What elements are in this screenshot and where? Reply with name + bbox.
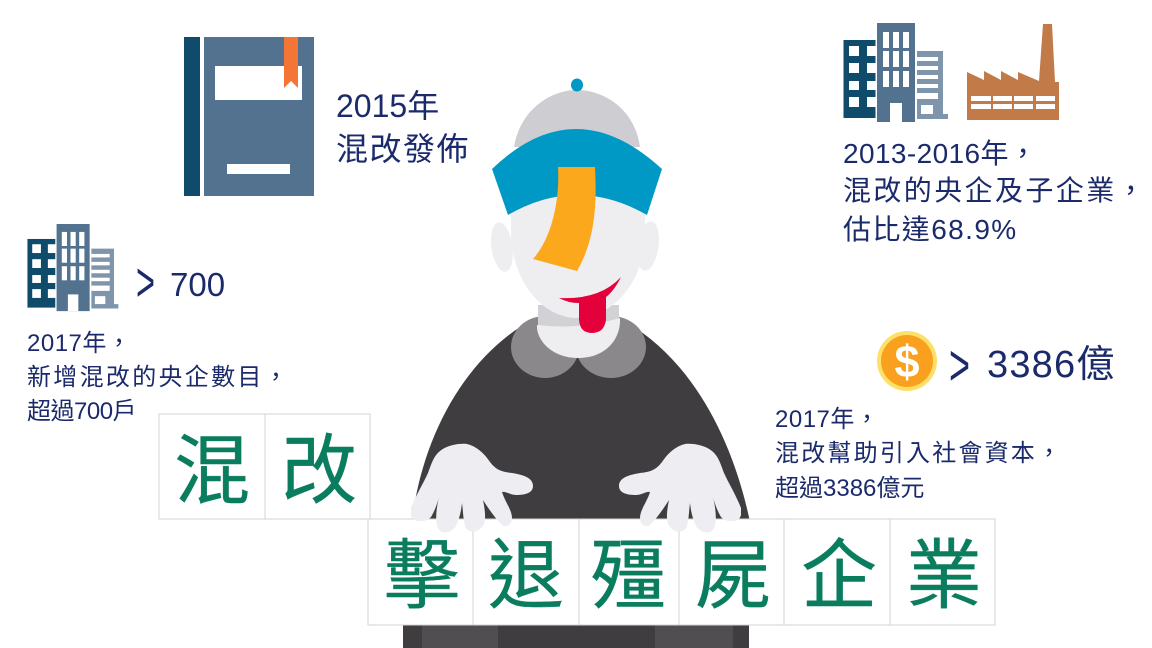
text: greater than 700: 700 bbox=[170, 266, 225, 303]
text: 2017 new enterprises: 2017年， bbox=[27, 330, 131, 357]
text: 2015 release bbox=[336, 88, 470, 167]
sign: 擊退殭屍企業: 業 bbox=[906, 514, 982, 624]
icon: office buildings, left bbox=[27, 224, 118, 311]
icon: factory bbox=[967, 24, 1059, 120]
mouth and tongue bbox=[559, 277, 621, 333]
text: 2017 social capital: 混改幫助引入社會資本， bbox=[775, 440, 1063, 467]
icon: office buildings, right bbox=[844, 23, 948, 122]
face bbox=[511, 190, 645, 318]
collar bbox=[511, 305, 646, 378]
sign: 擊退殭屍企業: 屍 bbox=[695, 514, 771, 624]
sign: 擊退殭屍企業: 擊 bbox=[384, 514, 460, 624]
icon: dollar coin bbox=[877, 331, 937, 391]
text: greater than 700: > bbox=[136, 251, 155, 313]
sign: 擊退殭屍企業 bbox=[368, 514, 995, 625]
talisman paper bbox=[533, 167, 596, 271]
text: greater than 3386: 3386億 bbox=[987, 344, 1116, 386]
text: 2017 social capital: 2017年， bbox=[775, 406, 879, 433]
text: greater than 3386: > bbox=[949, 333, 970, 398]
body bbox=[403, 327, 750, 648]
sign: 擊退殭屍企業: 退 bbox=[488, 514, 564, 624]
sign: 擊退殭屍企業: 企 bbox=[801, 514, 877, 624]
text: 2015 release: 2015年 bbox=[336, 88, 439, 124]
text: greater than 3386 bbox=[949, 333, 1116, 398]
text: 2015 release: 混改發佈 bbox=[336, 131, 470, 167]
left hand bbox=[411, 444, 533, 532]
text: 2013-2016 share: 估比達68.9% bbox=[843, 214, 1018, 245]
text: 2013-2016 share: 2013-2016年， bbox=[843, 138, 1037, 169]
figure: jiangshi zombie bbox=[403, 78, 750, 648]
ears bbox=[488, 220, 662, 273]
text: 2017 social capital bbox=[775, 406, 1063, 502]
sign: 混改: 改 bbox=[281, 409, 357, 519]
text: 2017 new enterprises: 超過700戶 bbox=[27, 398, 136, 425]
text: 2017 social capital: 超過3386億元 bbox=[775, 475, 924, 502]
text: greater than 700 bbox=[136, 251, 225, 313]
icon: book bbox=[184, 37, 314, 196]
sign: 混改 bbox=[159, 409, 370, 519]
text: 2013-2016 share bbox=[843, 138, 1147, 245]
hat dome bbox=[514, 90, 640, 147]
text: 2017 new enterprises bbox=[27, 330, 290, 425]
text: 2013-2016 share: 混改的央企及子企業， bbox=[843, 175, 1147, 206]
text: 2017 new enterprises: 新增混改的央企數目， bbox=[27, 364, 290, 391]
icon: dollar coin: $ bbox=[894, 336, 920, 387]
right hand bbox=[619, 444, 741, 532]
sign: 擊退殭屍企業: 殭 bbox=[590, 514, 666, 624]
hat knob bbox=[571, 78, 583, 92]
sign: 混改: 混 bbox=[174, 409, 250, 519]
hat brim bbox=[492, 129, 662, 215]
